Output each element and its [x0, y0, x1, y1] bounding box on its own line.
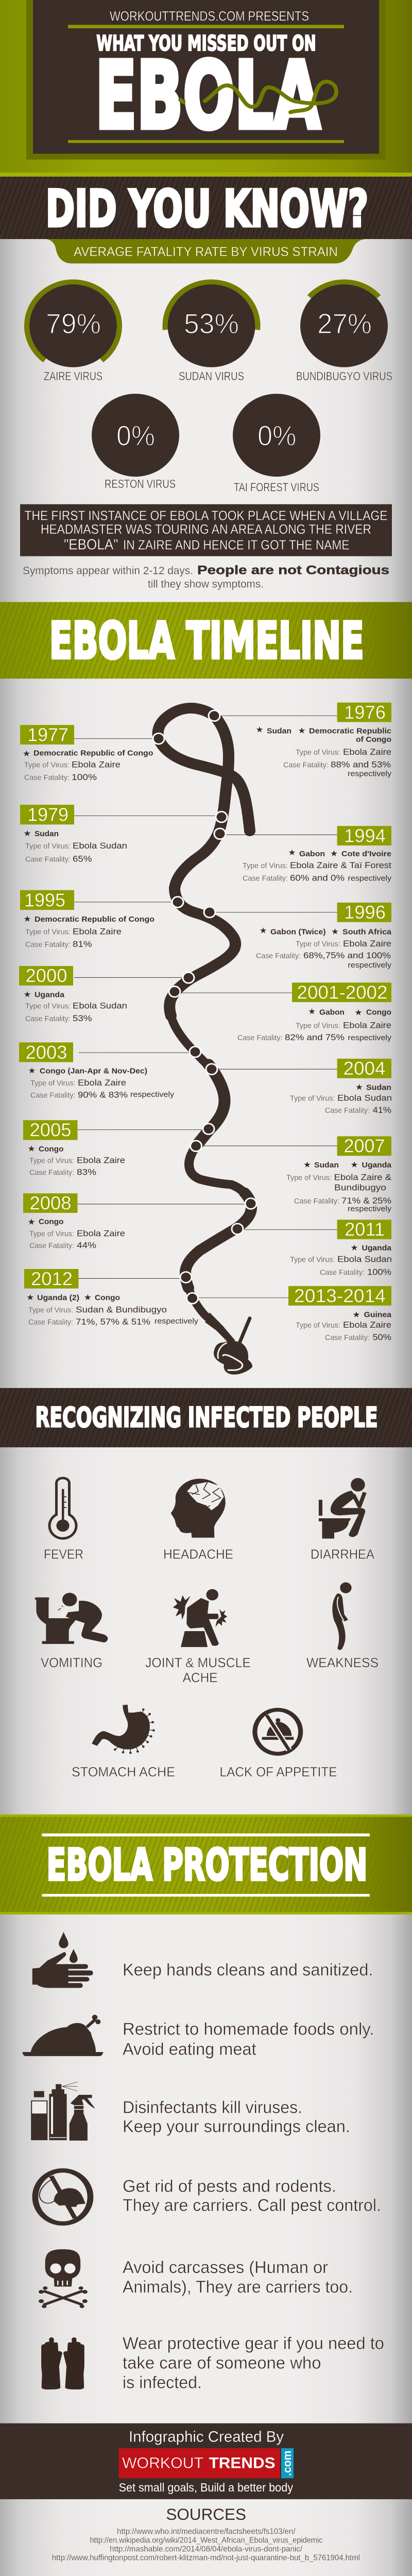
label: FEVER	[44, 1547, 83, 1562]
icon: roast turkey	[22, 2015, 104, 2056]
event 2008: ★	[27, 1217, 36, 1227]
event 1979: ★	[23, 829, 31, 838]
event 2001-2002: Ebola Zaire	[343, 1020, 391, 1030]
event 2007: 2007	[344, 1136, 385, 1157]
event 1977	[20, 724, 153, 782]
event 2013-2014: ★	[352, 1310, 360, 1319]
event 1979: 1979	[27, 805, 68, 825]
event 2007: ★	[350, 1160, 358, 1170]
tip: disinfectants: Keep your surroundings clean.	[123, 2117, 350, 2136]
connector lines	[74, 716, 337, 1298]
nodes on the snake	[153, 710, 256, 1303]
event 2013-2014: Ebola Zaire	[343, 1320, 391, 1330]
event 2012: 71%, 57% & 51%	[76, 1316, 150, 1327]
sources: http://www.huffingtonpost.com/robert-klitzman-md/not-just-quarantine-but_b_5761904.html	[52, 2553, 360, 2563]
event 1979	[20, 805, 127, 863]
gauge: zaire virus	[27, 282, 119, 383]
event 2003: Congo (Jan-Apr & Nov-Dec)	[40, 1067, 147, 1075]
event 2005: Type of Virus:	[29, 1157, 74, 1165]
event 1976: Type of Virus:	[296, 748, 340, 757]
event 1977: Ebola Zaire	[72, 759, 121, 769]
event 1994: Cote d'Ivoire	[341, 850, 391, 858]
event 2011	[290, 1219, 392, 1277]
worm through title	[180, 81, 336, 112]
event 2001-2002: ★	[354, 1008, 363, 1018]
event 2005: Congo	[39, 1145, 64, 1154]
event 1995: ★	[23, 914, 31, 924]
event 2013-2014: Guinea	[364, 1311, 391, 1319]
event 2004	[290, 1058, 392, 1115]
sources: http://en.wikipedia.org/wiki/2014_West_African_Ebola_virus_epidemic	[90, 2535, 323, 2545]
logo: TRENDS	[209, 2455, 276, 2472]
event 1979: Ebola Sudan	[73, 840, 127, 851]
event 2001-2002: Case Fatality:	[237, 1033, 283, 1042]
event 2008: Case Fatality:	[29, 1242, 74, 1250]
event 2012: Case Fatality:	[28, 1318, 73, 1327]
event 2012	[24, 1268, 198, 1327]
gauge: sudan virus: 53%	[184, 308, 239, 339]
event 1996: ★	[259, 926, 267, 935]
event 1994: 60% and 0%	[290, 873, 345, 883]
event 1979: Type of Virus:	[25, 842, 71, 851]
event 2012: ★	[26, 1293, 34, 1302]
event 2003: Type of Virus:	[30, 1079, 76, 1088]
event 2007	[286, 1136, 391, 1213]
fatality rate tab	[46, 239, 365, 263]
event 1976: Case Fatality:	[283, 761, 329, 769]
event 2001-2002: ★	[308, 1007, 316, 1016]
tip: clean hands	[32, 1932, 373, 1988]
tip: carcasses: Avoid carcasses (Human or	[123, 2258, 328, 2277]
icon: person with joint pain: ACHE	[183, 1670, 218, 1685]
event 2004: Sudan	[366, 1083, 391, 1092]
event 2013-2014	[288, 1285, 391, 1342]
event 2003: respectively	[130, 1090, 174, 1099]
sources	[52, 2505, 360, 2563]
event 2013-2014: Case Fatality:	[325, 1333, 370, 1342]
label: STOMACH ACHE	[72, 1765, 175, 1780]
event 2003: Ebola Zaire	[78, 1077, 126, 1088]
event 1996: ★	[331, 927, 339, 936]
rule top	[68, 25, 344, 28]
event 2007: Type of Virus:	[286, 1174, 332, 1182]
tip: homemade food: Avoid eating meat	[123, 2040, 256, 2059]
event 1976: ★	[255, 725, 264, 734]
event 2004: 2004	[343, 1058, 385, 1079]
event 2013-2014: Type of Virus:	[296, 1321, 340, 1330]
event 1996: Ebola Zaire	[343, 939, 391, 948]
event 2005: Case Fatality:	[29, 1168, 74, 1177]
tip: disinfectants	[31, 2082, 350, 2141]
event 1995: Type of Virus:	[25, 928, 71, 936]
gauge: tai forest virus: TAI FOREST VIRUS	[234, 481, 319, 494]
icon: person with joint pain	[145, 1589, 251, 1685]
tip: clean hands: Keep hands cleans and sanitized.	[123, 1960, 373, 1979]
event 2005: 83%	[77, 1167, 96, 1177]
event 2000: 53%	[73, 1013, 92, 1023]
event 2012: respectively	[154, 1317, 198, 1326]
logo	[119, 2448, 294, 2478]
event 2004: ★	[355, 1082, 363, 1092]
icon: crossed out meal	[219, 1710, 337, 1780]
symptoms note	[23, 564, 389, 590]
event 2007: Ebola Zaire &	[334, 1172, 391, 1182]
logo: .com	[281, 2451, 294, 2476]
event 1994	[243, 825, 391, 883]
tip: protective gear	[41, 2334, 384, 2392]
event 2007: Uganda	[362, 1161, 391, 1170]
gauge: sudan virus	[165, 282, 258, 383]
event 2005	[23, 1120, 125, 1177]
event 1994: ★	[288, 848, 296, 857]
event 1994: Case Fatality:	[243, 874, 288, 883]
event 2007: ★	[303, 1160, 311, 1170]
tip: carcasses: Animals), They are carriers too.	[123, 2278, 353, 2297]
event 1995: 1995	[24, 890, 65, 910]
event 2013-2014: 50%	[373, 1332, 391, 1342]
event 2000	[19, 965, 127, 1023]
event 2008	[23, 1193, 125, 1250]
tip: pests: They are carriers. Call pest control.	[123, 2196, 381, 2215]
snake knot	[214, 1341, 252, 1375]
event 1996: Type of Virus:	[296, 940, 340, 948]
event 2004: Ebola Sudan	[337, 1093, 392, 1103]
event 2005: 2005	[30, 1120, 72, 1140]
event 2005: Ebola Zaire	[77, 1155, 125, 1165]
event 2012: Congo	[95, 1294, 120, 1302]
event 2000: ★	[23, 990, 31, 999]
tip: pests	[35, 2171, 381, 2224]
gauge: reston virus: RESTON VIRUS	[105, 478, 176, 490]
credit line: Infographic Created By	[129, 2429, 284, 2445]
event 1977: 1977	[27, 724, 68, 745]
event 1976: respectively	[348, 770, 391, 778]
tip: protective gear: Wear protective gear if you need to	[123, 2334, 384, 2353]
event 2001-2002: 82% and 75%	[285, 1032, 345, 1042]
event 2003	[19, 1042, 174, 1100]
event 1996: Case Fatality:	[256, 952, 301, 960]
origin fact box: IN ZAIRE AND HENCE IT GOT THE NAME	[123, 537, 350, 552]
event 2011: 100%	[367, 1267, 391, 1277]
event 1996: respectively	[348, 961, 391, 970]
event 1996: 68%,75% and 100%	[303, 950, 391, 960]
presenter line: WORKOUTTRENDS.COM PRESENTS	[110, 8, 309, 24]
label: WEAKNESS	[306, 1655, 379, 1670]
event 1995: Democratic Republic of Congo	[35, 915, 154, 924]
event 2001-2002	[237, 982, 391, 1042]
tip: disinfectants: Disinfectants kill viruses.	[123, 2098, 302, 2117]
event 2008: Type of Virus:	[29, 1230, 74, 1239]
gauge: zaire virus: ZAIRE VIRUS	[44, 370, 102, 383]
icon: head with brain, headache	[163, 1479, 233, 1562]
recognizing banner	[0, 1388, 412, 1447]
event 2008: Ebola Zaire	[77, 1228, 125, 1239]
event 1994: respectively	[348, 874, 391, 883]
tip: homemade food	[22, 2015, 374, 2059]
event 1976: ★	[298, 726, 306, 735]
event 2011: ★	[350, 1243, 358, 1252]
icon: thermometer, fever	[44, 1478, 83, 1562]
label: HEADACHE	[163, 1547, 233, 1562]
event 1994: 1994	[344, 825, 386, 846]
tip: protective gear: is infected.	[123, 2373, 202, 2392]
gauge: tai forest virus	[233, 394, 320, 494]
rule bottom	[68, 140, 344, 143]
gauge: zaire virus: 79%	[46, 308, 101, 339]
gauge: bundibugyo virus	[296, 282, 392, 383]
event 2012: Uganda (2)	[37, 1294, 79, 1302]
tip: carcasses	[39, 2249, 353, 2308]
icon: cleaning bottles	[31, 2082, 95, 2141]
event 2007: Bundibugyo	[334, 1182, 386, 1192]
icon: no rodents	[35, 2171, 91, 2224]
event 1976: Sudan	[267, 727, 291, 735]
event 1996	[256, 902, 391, 970]
event 2005: ★	[27, 1144, 36, 1154]
event 1979: Case Fatality:	[25, 855, 71, 863]
label: JOINT & MUSCLE	[145, 1655, 251, 1670]
event 2004: Type of Virus:	[290, 1094, 335, 1103]
event 1976	[255, 702, 391, 778]
label: LACK OF APPETITE	[219, 1765, 337, 1780]
symptoms note: till they show symptoms.	[148, 578, 264, 590]
event 2000: 2000	[26, 965, 67, 986]
event 1996: 1996	[344, 902, 386, 923]
icon: person at toilet, vomiting	[35, 1593, 108, 1670]
event 1976: Ebola Zaire	[343, 747, 391, 757]
event 2008: 44%	[77, 1240, 96, 1250]
event 1977: Type of Virus:	[24, 761, 70, 769]
event 2007: 71% & 25%	[341, 1196, 391, 1206]
icon: gloves	[41, 2337, 84, 2389]
icon: stomach	[72, 1705, 175, 1780]
event 2007: Sudan	[314, 1161, 339, 1170]
event 2003: ★	[28, 1066, 36, 1075]
event 1976: 1976	[344, 702, 386, 723]
gauge: tai forest virus: 0%	[258, 420, 297, 451]
tip: pests: Get rid of pests and rodents.	[123, 2177, 336, 2196]
sources: http://www.who.int/mediacentre/factsheets/fs103/en/	[117, 2527, 296, 2536]
timeline banner	[0, 602, 412, 679]
event 1994: Type of Virus:	[243, 861, 288, 870]
event 1976: Democratic Republic	[309, 727, 391, 735]
event 2008: Congo	[39, 1217, 64, 1226]
footer credit panel	[0, 2424, 412, 2499]
event 2000: Uganda	[35, 991, 64, 999]
event 1977: ★	[23, 749, 30, 758]
gauge: sudan virus: SUDAN VIRUS	[179, 370, 244, 383]
origin fact box	[20, 504, 392, 556]
event 1976: 88% and 53%	[331, 759, 391, 769]
event 2008: 2008	[30, 1193, 72, 1213]
event 2011: 2011	[345, 1219, 385, 1240]
header panel	[0, 0, 412, 177]
event 2003: 2003	[26, 1042, 67, 1063]
icon: drooping person, weakness	[306, 1582, 379, 1670]
event 2011: Ebola Sudan	[337, 1254, 392, 1264]
event 1979: 65%	[73, 854, 92, 863]
origin fact box: "EBOLA"	[64, 537, 118, 553]
event 2001-2002: Type of Virus:	[296, 1022, 340, 1030]
event 2012: 2012	[31, 1268, 73, 1289]
gauge: bundibugyo virus: 27%	[317, 308, 372, 339]
event 2001-2002: 2001-2002	[297, 982, 388, 1003]
event 2011: Type of Virus:	[290, 1256, 335, 1264]
symptoms note: Symptoms appear within 2-12 days.	[23, 565, 193, 577]
event 2004: Case Fatality:	[325, 1106, 370, 1115]
event 1979: Sudan	[35, 829, 59, 838]
event 1977: Democratic Republic of Congo	[33, 749, 153, 757]
protection banner	[0, 1815, 412, 1914]
icon: person on toilet, diarrhea	[311, 1478, 374, 1562]
event 2001-2002: Gabon	[319, 1008, 345, 1017]
event 1995: Case Fatality:	[25, 940, 71, 949]
event 2001-2002: respectively	[348, 1033, 391, 1042]
event 1996: South Africa	[342, 928, 391, 936]
event 2012: Sudan & Bundibugyo	[76, 1304, 167, 1314]
event 2012: Type of Virus:	[28, 1306, 73, 1314]
event 2007: respectively	[348, 1205, 391, 1213]
label: VOMITING	[41, 1655, 102, 1670]
tagline: Set small goals, Build a better body	[119, 2481, 293, 2494]
event 1996: Gabon (Twice)	[270, 928, 326, 936]
event 1976: of Congo	[356, 735, 391, 744]
event 1995	[20, 890, 154, 949]
event 2007: Case Fatality:	[294, 1197, 339, 1206]
event 2003: Case Fatality:	[30, 1091, 76, 1100]
sources: SOURCES	[166, 2505, 246, 2523]
event 2012: ★	[84, 1293, 92, 1302]
gauge: reston virus: 0%	[116, 420, 155, 451]
icon: hand with drops	[32, 1932, 93, 1988]
symptoms note: People are not Contagious	[197, 564, 389, 577]
event 2003: 90% & 83%	[78, 1090, 128, 1100]
event 2001-2002: Congo	[366, 1008, 391, 1017]
timeline snake	[158, 708, 251, 1343]
icon: skull and crossbones	[39, 2249, 88, 2308]
event 2000: Ebola Sudan	[73, 1001, 127, 1010]
event 2000: Type of Virus:	[25, 1002, 71, 1010]
event 1994: ★	[330, 849, 338, 858]
event 1977: 100%	[72, 772, 97, 782]
event 1994: Gabon	[299, 850, 325, 858]
event 2013-2014: 2013-2014	[294, 1285, 386, 1306]
gauge: reston virus	[92, 394, 179, 490]
label: DIARRHEA	[311, 1547, 374, 1562]
sources: http://mashable.com/2014/08/04/ebola-virus-dont-panic/	[110, 2544, 302, 2554]
event 2000: Case Fatality:	[25, 1014, 71, 1023]
tip: homemade food: Restrict to homemade foods only.	[123, 2020, 374, 2039]
event 1995: 81%	[73, 939, 92, 949]
tip: protective gear: take care of someone who	[123, 2353, 321, 2372]
event 2011: Uganda	[362, 1244, 391, 1252]
event 1995: Ebola Zaire	[73, 926, 122, 936]
logo: WORKOUT	[122, 2455, 203, 2472]
event 2011: Case Fatality:	[320, 1268, 365, 1277]
event 1994: Ebola Zaire & Taï Forest	[290, 860, 391, 870]
event 1977: Case Fatality:	[24, 774, 70, 782]
fatality rate tab: AVERAGE FATALITY RATE BY VIRUS STRAIN	[74, 245, 338, 259]
event 2004: 41%	[373, 1105, 391, 1115]
